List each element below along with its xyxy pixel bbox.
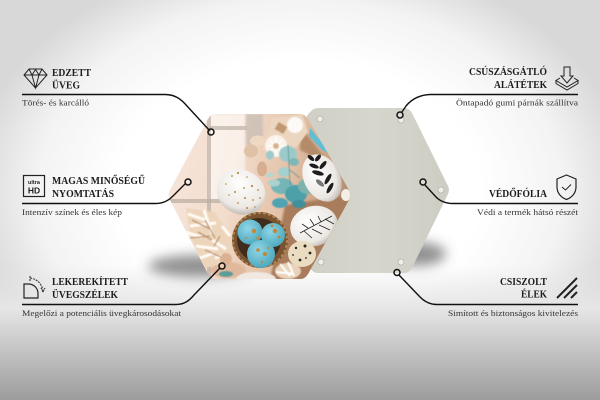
branch-painted egg bbox=[290, 206, 338, 246]
leader line to film bbox=[425, 185, 578, 204]
icon: ultra HD: HD bbox=[28, 186, 40, 196]
lower right flower bbox=[236, 261, 302, 279]
marker bbox=[420, 179, 426, 185]
icon: ultra HD bbox=[24, 176, 44, 196]
description: Öntapadó gumi párnák szállítva bbox=[456, 98, 578, 108]
teal foliage bbox=[266, 145, 318, 208]
icon: ultra HD: ultra bbox=[28, 180, 41, 186]
speckled white egg bbox=[216, 170, 266, 215]
leader line to print bbox=[22, 183, 186, 204]
description: Védi a termék hátsó részét bbox=[477, 207, 579, 217]
description: Simított és biztonságos kivitelezés bbox=[448, 308, 578, 318]
nest with blue eggs bbox=[232, 212, 288, 268]
hexagon shadows bbox=[148, 242, 446, 277]
leader line to glass bbox=[22, 94, 210, 131]
flowers top right bbox=[262, 114, 308, 157]
brown table shade bbox=[210, 125, 350, 280]
back panel hexagon with adhesive pads bbox=[300, 108, 449, 273]
marker bbox=[394, 270, 400, 276]
marker bbox=[208, 129, 214, 135]
leader line to edge bbox=[22, 268, 220, 304]
heading: csiszolt élek: ÉLEK bbox=[521, 288, 548, 300]
feature: polished edges (bottom right) bbox=[394, 270, 578, 318]
heading: csúszásgátló alátétek: CSÚSZÁSGÁTLÓ bbox=[469, 66, 547, 78]
description: Törés- és karcálló bbox=[22, 98, 89, 108]
glass hexagon photo: Easter eggs bbox=[168, 114, 350, 279]
window light bbox=[168, 114, 263, 279]
icon: pad with arrow bbox=[556, 67, 578, 90]
leader line to pad bbox=[402, 94, 578, 112]
heading: lekerekített üvegszélek: LEKEREKÍTETT bbox=[52, 276, 128, 288]
heading: lekerekített üvegszélek: ÜVEGSZÉLEK bbox=[52, 288, 119, 301]
icon: diagonal stripes bbox=[557, 278, 577, 298]
icon: shield with check bbox=[557, 175, 576, 200]
leaf-painted egg bbox=[302, 154, 342, 202]
heading: csúszásgátló alátétek: ALÁTÉTEK bbox=[494, 79, 548, 91]
icon: rounded corner bbox=[24, 276, 45, 298]
marker bbox=[397, 112, 403, 118]
description: Intenzív színek és éles kép bbox=[22, 207, 122, 217]
feature: anti-slip pads (top right) bbox=[397, 66, 578, 118]
small eggs bbox=[244, 136, 351, 201]
heading: magas minőségű nyomtatás: NYOMTATÁS bbox=[52, 188, 114, 200]
heading: edzett üveg: EDZETT bbox=[52, 68, 91, 79]
feature: high quality print (middle left) bbox=[22, 175, 191, 217]
marker bbox=[185, 179, 191, 185]
description: Megelőzi a potenciális üvegkárosodásokat bbox=[22, 308, 182, 318]
heading: védőfólia: VÉDŐFÓLIA bbox=[489, 188, 547, 200]
icon: diamond bbox=[24, 69, 47, 88]
feature: tempered glass (top left) bbox=[22, 68, 214, 135]
heading: edzett üveg: ÜVEG bbox=[52, 78, 80, 92]
heading: magas minőségű nyomtatás: MAGAS MINŐSÉGŰ bbox=[52, 175, 145, 187]
speckled small egg bbox=[288, 241, 316, 267]
marker bbox=[219, 263, 225, 269]
feature: rounded glass edges (bottom left) bbox=[22, 263, 225, 318]
flowers bottom left bbox=[184, 208, 233, 277]
feature: protective film (middle right) bbox=[420, 175, 579, 217]
heading: csiszolt élek: CSISZOLT bbox=[500, 277, 547, 288]
leader line to edge bbox=[399, 275, 578, 304]
blue decoration top right bbox=[309, 128, 328, 153]
